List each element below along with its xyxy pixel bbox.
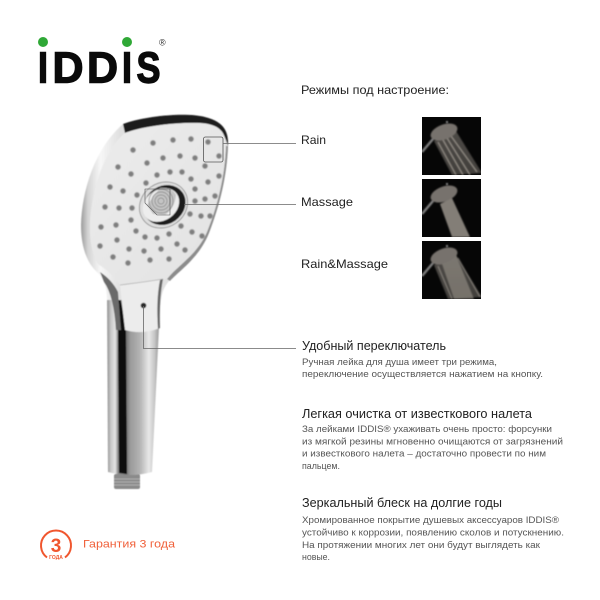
logo: IDDIS: I [122, 44, 132, 92]
text block: convenient switch: Удобный переключатель [302, 339, 446, 353]
connector thread [114, 474, 140, 489]
massage nozzle button [130, 173, 197, 237]
warranty badge: 3 [51, 536, 61, 557]
logo: IDDIS: D [87, 44, 118, 92]
logo: IDDIS: S [136, 44, 160, 92]
text block: convenient switch: Ручная лейка для душа имеет три режима, [302, 357, 497, 368]
photo: rain and massage mode [422, 241, 482, 299]
text block: mirror shine: На протяжении многих лет они будут выглядеть как [302, 540, 541, 551]
label: Rain&Massage: Rain&Massage [301, 257, 388, 271]
callout: switch [144, 306, 296, 348]
nozzles [97, 136, 222, 266]
text block: mirror shine [302, 496, 564, 563]
text block: easy cleaning: За лейками IDDIS® ухаживать очень просто: форсунки [302, 424, 552, 435]
shower head product photo [81, 115, 228, 489]
heading: modes: Режимы под настроение: [301, 83, 449, 97]
logo: IDDIS: I [38, 44, 48, 92]
text block: easy cleaning: Легкая очистка от известкового налета [302, 407, 532, 421]
warranty badge [41, 530, 71, 561]
logo: IDDIS: D [52, 44, 84, 92]
switch button cap [120, 279, 163, 332]
text block: mirror shine: Хромированное покрытие душевых аксессуаров IDDIS® [302, 515, 559, 526]
logo: IDDIS [38, 37, 166, 92]
head chrome shell [81, 115, 228, 300]
face plate [90, 123, 226, 285]
photo: massage mode [422, 179, 481, 237]
photo: rain mode [422, 117, 482, 175]
text block: convenient switch: переключение осуществляется нажатием на кнопку. [302, 369, 543, 380]
callout: Rain [204, 137, 296, 162]
warranty badge: ГОДА [49, 555, 63, 561]
label: Massage: Massage [301, 195, 353, 209]
text block: mirror shine: новые. [302, 552, 330, 563]
neck shadow [100, 272, 121, 330]
handle [107, 285, 161, 475]
text block: easy cleaning: пальцем. [302, 461, 340, 472]
label: Rain: Rain [301, 133, 326, 147]
text block: convenient switch [302, 339, 543, 380]
text block: easy cleaning: из мягкой резины мгновенно очищаются от загрязнений [302, 436, 563, 448]
text block: easy cleaning [302, 407, 563, 472]
callout: Massage [145, 189, 296, 215]
warranty text: Гарантия 3 года [83, 538, 176, 550]
text block: mirror shine: Зеркальный блеск на долгие годы [302, 496, 502, 510]
text block: easy cleaning: и известкового налета – достаточно провести по ним [302, 448, 546, 460]
text block: mirror shine: устойчиво к коррозии, появлению сколов и потускнению. [302, 528, 564, 538]
logo: IDDIS: ® [159, 38, 166, 48]
